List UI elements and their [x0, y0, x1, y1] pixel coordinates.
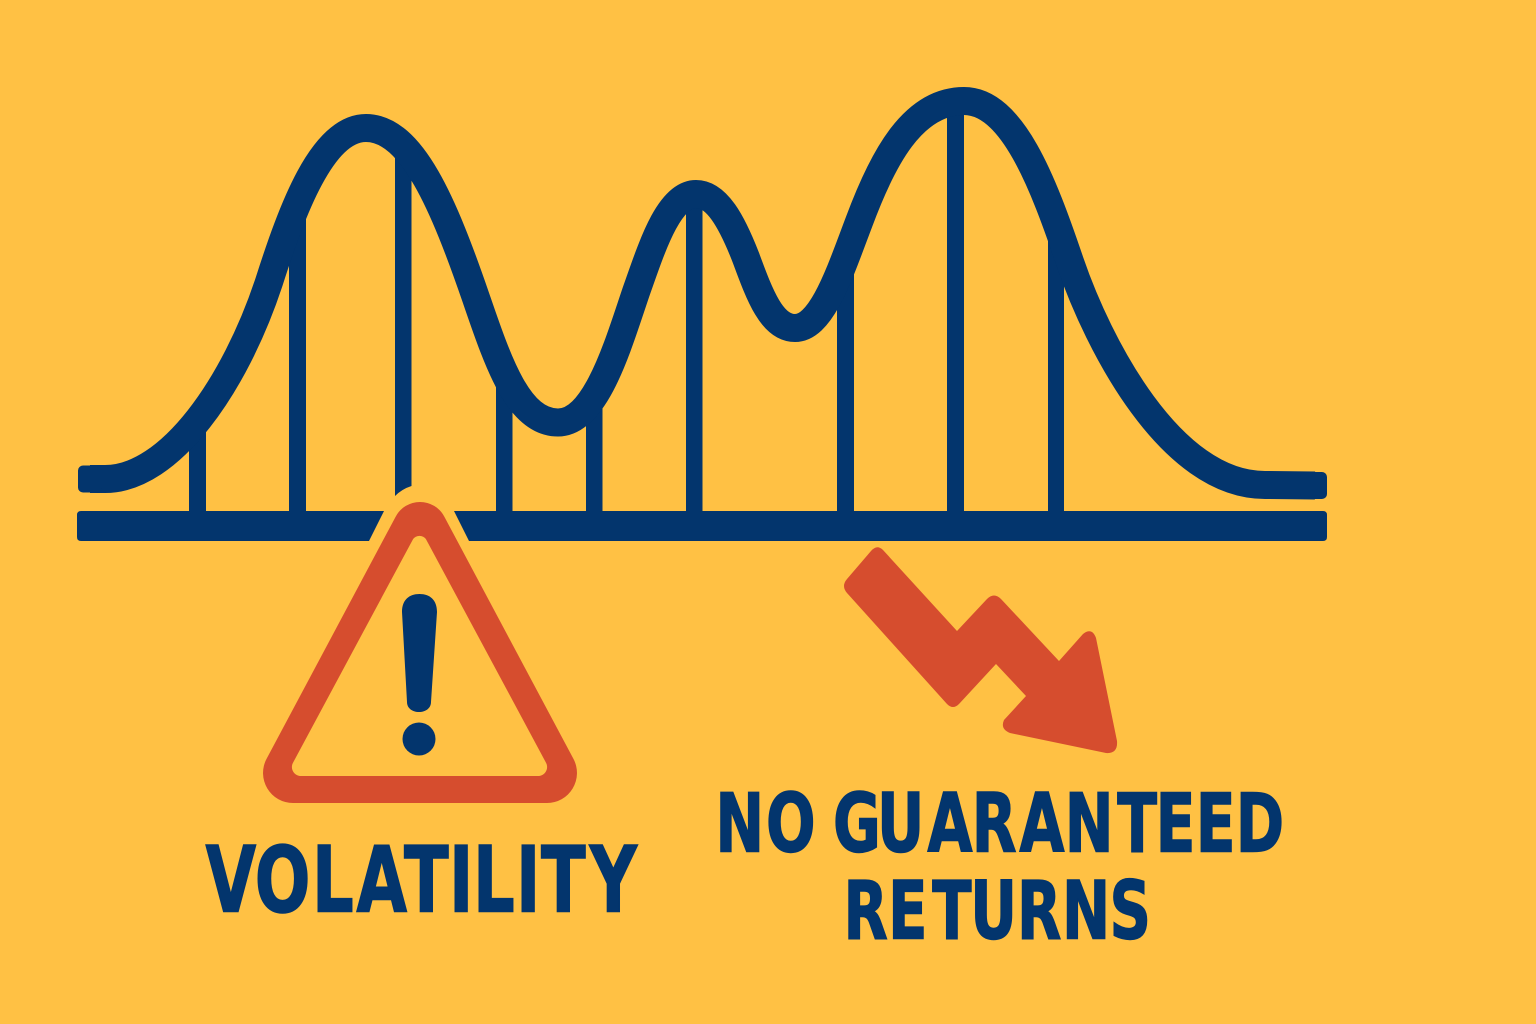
- icon: falling zigzag arrow: [844, 547, 1117, 753]
- exclamation mark: [402, 594, 437, 756]
- baseline axis: [77, 511, 1327, 541]
- label: no guaranteed: NO GUARANTEED: [715, 776, 1284, 871]
- label: returns: RETURNS: [843, 865, 1151, 958]
- chart: multi-peak volatility curve: [77, 101, 1327, 541]
- curve line: [78, 101, 1327, 499]
- icon: warning triangle: [263, 502, 577, 803]
- vertical bars: [189, 105, 1064, 515]
- triangle outline: [263, 502, 577, 803]
- label: volatility: VOLATILITY: [206, 827, 638, 933]
